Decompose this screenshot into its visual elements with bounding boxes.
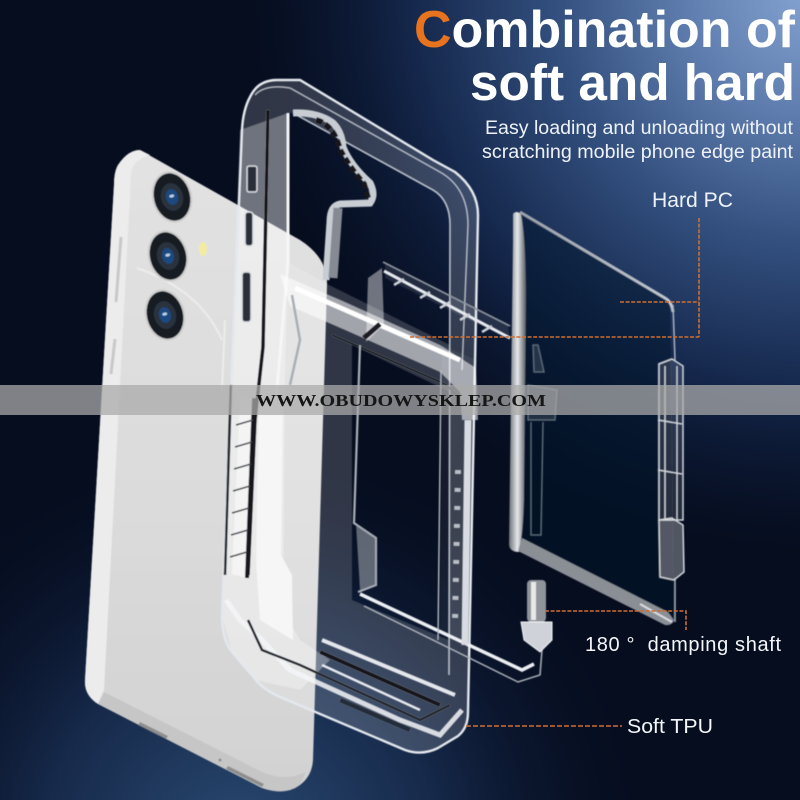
subtitle: Easy loading and unloading without: [485, 118, 794, 139]
callout line: soft TPU: [466, 725, 622, 727]
lower corner structure: [226, 600, 462, 735]
right edge: [673, 305, 675, 622]
flash: [199, 242, 207, 256]
magnet ring hint: [137, 268, 225, 390]
subtitle: [482, 118, 794, 163]
label: hard PC: Hard PC: [652, 189, 733, 212]
inner card holder: [354, 262, 557, 682]
top edge highlight: [520, 212, 673, 312]
left side vertical rails: [248, 110, 268, 575]
title: Combination of: [414, 1, 796, 59]
left thick edge: [509, 212, 526, 552]
left band glaze over phone: [222, 113, 330, 690]
ladder grip: [225, 385, 254, 578]
label: damping shaft: 180 ° damping shaft: [585, 634, 781, 656]
bright inner column over phone: [256, 400, 293, 640]
title: [414, 1, 796, 111]
label: soft TPU: Soft TPU: [627, 716, 713, 738]
phone bottom edge: [98, 692, 306, 791]
camera cutout lip: [293, 113, 373, 280]
holder bottom rail: [360, 594, 534, 670]
frame body: [222, 80, 478, 753]
bottom edge: [518, 538, 674, 625]
subtitle: scratching mobile phone edge paint: [482, 142, 794, 163]
inner top rim: [293, 113, 450, 675]
callout line: damping shaft: [545, 611, 686, 630]
clear case frame: [222, 80, 478, 753]
inner clear post: [528, 345, 557, 535]
watermark band: [0, 385, 800, 415]
holder dotted strip: [440, 345, 476, 645]
camera lenses: [139, 167, 198, 345]
phone back: [85, 150, 327, 791]
side hinge bar: [658, 359, 684, 580]
hard PC back: [509, 212, 684, 625]
inner rim second band: [255, 87, 468, 370]
callout line: hard PC: [410, 218, 699, 337]
speaker slots: [138, 722, 264, 787]
holder left post: [366, 268, 384, 342]
phone edge strip: [85, 150, 150, 704]
holder left rail: [354, 345, 376, 592]
holder top rail: [385, 262, 510, 340]
title: soft and hard: [470, 54, 795, 111]
cross bar: [280, 274, 478, 420]
inner structure over phone: [290, 295, 300, 385]
button slots: [242, 166, 257, 322]
hinge: [521, 580, 552, 652]
volume buttons: [111, 237, 121, 374]
watermark text: WWW.OBUDOWYSKLEP.COM: [256, 391, 546, 410]
panel glass: [512, 212, 674, 625]
outer outline: [222, 80, 478, 753]
